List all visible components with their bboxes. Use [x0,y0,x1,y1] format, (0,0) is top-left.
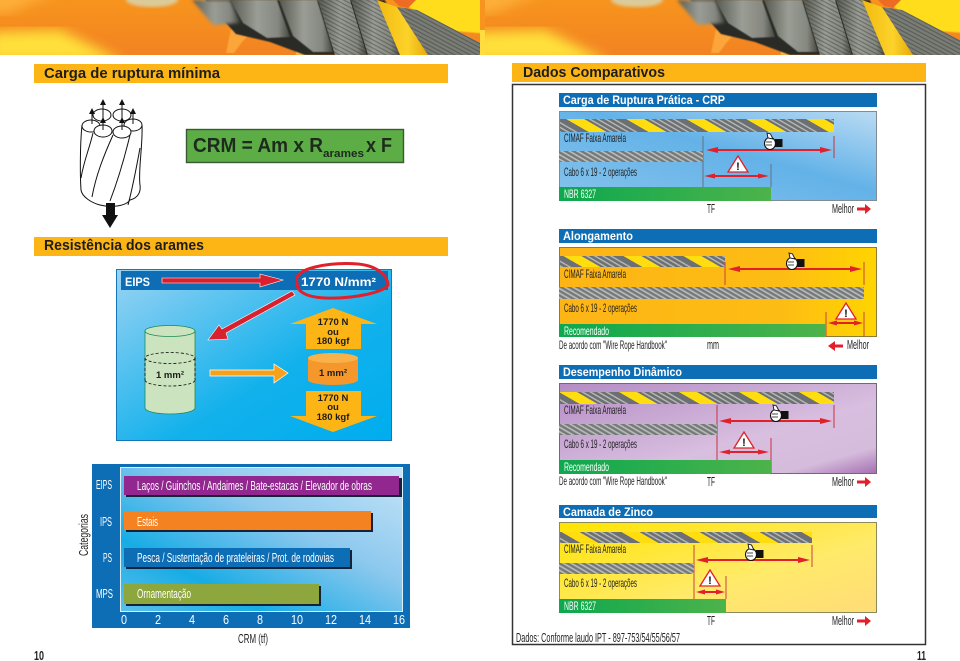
arrow: 6x19 difference [828,320,863,326]
arrow: CIMAF advantage [719,418,832,424]
axis numbers: 2 [155,612,161,627]
category labels: IPS [100,514,112,529]
up force arrow [290,308,377,349]
down force arrow: 1770 N [318,393,348,404]
axis title: CRM (tf): CRM (tf) [238,631,268,646]
panel: Camada de Zinco: TF [707,613,715,628]
icon: warning: ! [708,575,712,587]
arrow: value to wire [208,291,295,340]
heading: Dados Comparativos [512,63,926,82]
panel: Alongamento: Alongamento [563,231,633,243]
panel: Alongamento: Cabo 6 x 19 - 2 operações [564,301,637,315]
icon: thumbs up [770,405,788,422]
formula: CRM: x F [366,135,392,157]
rope: CIMAF [560,392,834,404]
panel: Carga de Ruptura Prática: Cabo 6 x 19 - 2 operações [564,165,637,179]
rope: 6x19 [559,151,703,162]
category labels: MPS [96,586,113,601]
panel: Alongamento: De acordo com "Wire Rope Handbook" [559,338,667,352]
panel: Desempenho Dinâmico: Desempenho Dinâmico [563,367,682,379]
axis numbers: 0 [121,612,127,627]
axis numbers: 4 [189,612,195,627]
rope: CIMAF [560,119,834,132]
icon: warning: ! [742,437,746,449]
formula: CRM: CRM = Am x R [193,135,324,157]
icon: warning [700,570,720,587]
bar: Recomendado [559,460,771,474]
icon: warning: ! [736,161,740,173]
down force arrow: 180 kgf [317,412,350,423]
bar: PS: Pesca / Sustentação de prateleiras / Prot. de rodovias [137,550,334,565]
panel: Alongamento: Melhor [847,337,869,352]
arrow: EIPS to value [162,274,283,287]
bar: IPS [124,511,373,532]
arrow: 6x19 difference [704,174,769,178]
arrow: CIMAF advantage [706,147,832,153]
icon: warning [836,303,856,320]
bar: NBR 6327 [559,599,726,613]
heading: Carga de ruptura mínima [34,64,448,83]
bar: MPS: Ornamentação [137,586,191,601]
panel: Desempenho Dinâmico: De acordo com "Wire Rope Handbook" [559,474,667,488]
panel: Carga de Ruptura Prática: TF [707,201,715,216]
chart: CRM by category [92,464,410,628]
arrow: CIMAF advantage [728,266,862,272]
up force arrow: 180 kgf [317,336,350,347]
axis numbers: 6 [223,612,229,627]
panel: Desempenho Dinâmico: Cabo 6 x 19 - 2 operações [564,437,637,451]
cylinder: section [308,353,358,385]
icon: warning [728,156,748,173]
icon: warning: ! [844,308,848,320]
panel: Alongamento: mm [707,337,719,352]
arrow: better [857,477,871,487]
bar: MPS [124,584,321,606]
cylinder: section: 1 mm² [319,368,347,379]
axis numbers: 14 [359,612,371,627]
panel: Camada de Zinco [559,505,877,628]
panel: wire resistance diagram [116,264,392,440]
rope: CIMAF [560,532,812,543]
axis numbers [121,612,405,627]
bar: NBR 6327: NBR 6327 [564,187,596,201]
icon: thumbs up [746,544,764,560]
up force arrow: 1770 N [318,317,348,328]
EIPS strip: 1770 N/mm² [301,275,376,289]
red circled value [297,264,388,298]
arrow: 6x19 difference [696,590,725,594]
bar: Recomendado: Recomendado [564,324,609,338]
heading: Resistência dos arames: Resistência dos arames [44,238,204,254]
EIPS strip: EIPS [125,275,150,289]
heading: Dados Comparativos: Dados Comparativos [523,65,665,81]
icon: thumbs up [764,133,782,150]
panel: Desempenho Dinâmico [559,365,877,489]
icon: strand cable under tension [80,99,142,228]
category labels [96,477,113,601]
arrow: orange [210,364,288,383]
panel: Camada de Zinco: Melhor [832,613,854,628]
bar: Recomendado [559,324,826,338]
formula: CRM: arames [323,148,364,160]
axis numbers: 10 [291,612,303,627]
bar: IPS: Estais [137,514,158,529]
arrow: 6x19 difference [719,450,769,454]
rope: 6x19 [559,424,717,435]
bar: NBR 6327 [559,187,771,201]
up force arrow: ou [327,327,339,338]
axis numbers: 16 [393,612,405,627]
panel: Camada de Zinco: Camada de Zinco [563,507,653,519]
header photo: left wire rope [0,0,490,62]
heading: Carga de ruptura mínima: Carga de ruptura mínima [44,66,221,82]
rope: CIMAF [560,256,725,267]
header photo: right wire rope [475,0,960,62]
category labels: PS [103,550,112,565]
source note: Dados: Conforme laudo IPT - 897-753/54/55/56/57 [516,630,680,645]
heading: Resistência dos arames [34,237,448,256]
panel: Camada de Zinco: CIMAF Faixa Amarela [564,542,626,556]
bar: EIPS [124,476,402,497]
panel: Carga de Ruptura Prática [559,93,877,216]
category labels: EIPS [96,477,112,492]
panel: Desempenho Dinâmico: Melhor [832,474,854,489]
EIPS strip [121,271,388,290]
arrow: better [828,341,843,351]
arrow: better [857,616,871,626]
bar: Recomendado: Recomendado [564,460,609,474]
axis numbers: 12 [325,612,337,627]
axis numbers: 8 [257,612,263,627]
bar: EIPS: Laços / Guinchos / Andaimes / Bate-estacas / Elevador de obras [137,478,372,493]
panel: Desempenho Dinâmico: TF [707,474,715,489]
rope: 6x19 [559,287,864,299]
comparison frame [512,84,926,644]
panel: Carga de Ruptura Prática: CIMAF Faixa Amarela [564,131,626,145]
panel: Desempenho Dinâmico: CIMAF Faixa Amarela [564,403,626,417]
panel: Camada de Zinco: Cabo 6 x 19 - 2 operações [564,576,637,590]
panel: Alongamento: CIMAF Faixa Amarela [564,267,626,281]
arrow: CIMAF advantage [696,557,810,563]
down force arrow: ou [327,402,339,413]
rope: 6x19 [559,563,694,574]
panel: Alongamento [559,229,877,352]
formula: CRM [186,130,404,162]
axis title: Categorias: Categorias [76,514,91,556]
panel: Carga de Ruptura Prática: Carga de Ruptura Prática - CRP [563,95,725,107]
icon: warning [734,432,754,449]
bar: PS [124,548,352,569]
arrow: better [857,204,871,214]
bar: NBR 6327: NBR 6327 [564,599,596,613]
down force arrow [290,391,377,432]
cylinder: wire [145,326,195,414]
label: 1 mm²: 1 mm² [156,370,184,381]
icon: thumbs up [786,253,804,270]
panel: Carga de Ruptura Prática: Melhor [832,201,854,216]
